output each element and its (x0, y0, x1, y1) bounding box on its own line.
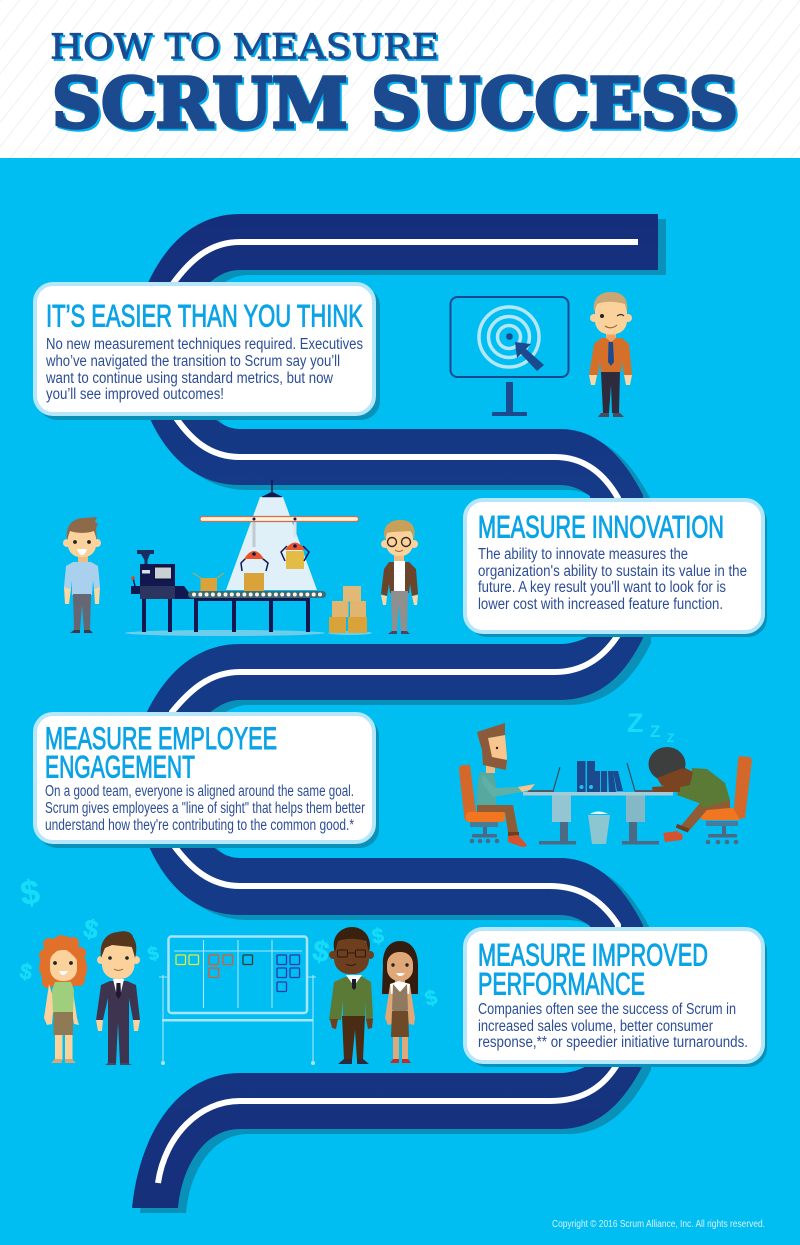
whiteboard with sticky notes (159, 936, 316, 1065)
decorative dollar signs (18, 873, 440, 1011)
decorative dollar signs: $ (310, 935, 332, 969)
body text: who’ve navigated the transition to Scrum say you’ll (45, 353, 340, 370)
figure: woman with dark hair in vest (382, 941, 418, 1063)
heading: IT’S EASIER THAN YOU THINK (46, 298, 363, 334)
winding road (132, 214, 666, 1213)
figure: man in dark suit (96, 931, 140, 1065)
Z Z Z (627, 708, 674, 745)
body text: No new measurement techniques required. Executives (46, 336, 363, 353)
robot arms (252, 521, 256, 547)
light cone (226, 497, 317, 590)
left laptop (553, 767, 560, 792)
decorative dollar signs: $ (423, 986, 440, 1011)
body text: The ability to innovate measures the (478, 546, 688, 563)
hopper (137, 550, 154, 566)
open box on belt (200, 578, 217, 591)
body text: you’ll see improved outcomes! (46, 386, 224, 403)
icon: monitor with target (450, 297, 568, 416)
sleeping man and chair (648, 747, 752, 844)
overhead rail (200, 516, 358, 522)
title line 1: HOW TO MEASURE (50, 28, 439, 68)
body text: On a good team, everyone is aligned around the same goal. (45, 783, 354, 800)
Z Z Z: Z (627, 708, 644, 738)
working man (477, 723, 535, 847)
scene: desk with working and sleeping employees (459, 708, 752, 847)
body text: response,** or speedier initiative turnarounds. (478, 1034, 748, 1051)
stacked boxes (343, 586, 361, 602)
binders (577, 761, 623, 792)
figure: woman with curly red hair (39, 935, 87, 1063)
figure: smiling man in blue shirt (63, 517, 101, 633)
Z Z Z: Z (650, 722, 660, 741)
left chair (459, 765, 505, 843)
table legs (142, 597, 310, 632)
sticky notes (176, 955, 300, 992)
heading: PERFORMANCE (478, 966, 645, 1002)
title line 1: HOW TO MEASURE (52, 30, 441, 70)
panel: it's easier than you think (35, 284, 380, 420)
body text: increased sales volume, better consumer (478, 1018, 713, 1035)
machine body (140, 564, 175, 587)
conveyor belt (188, 591, 326, 598)
title line 2: SCRUM SUCCESS (52, 64, 738, 144)
panel: measure employee engagement (35, 714, 379, 848)
body text (45, 783, 365, 834)
body text (478, 546, 747, 613)
heading (478, 936, 708, 1002)
panel: measure innovation (465, 500, 767, 637)
figure: man with glasses and brown jacket (381, 520, 418, 634)
heading (45, 720, 277, 784)
panel: measure improved performance (465, 929, 767, 1067)
body text: Scrum gives employees a "line of sight" that helps them better (45, 800, 365, 817)
Z Z Z: Z (667, 731, 674, 745)
decorative dollar signs: $ (371, 924, 386, 949)
decorative dollar signs: $ (81, 913, 102, 945)
body text (45, 336, 363, 403)
body text: Companies often see the success of Scrum in (478, 1001, 736, 1018)
decorative dollar signs: $ (18, 958, 34, 985)
table legs, bin (523, 792, 673, 844)
body text (478, 1001, 748, 1051)
body text: future. A key result you'll want to look for is (478, 579, 726, 596)
factory: production machine and conveyor (125, 480, 372, 636)
decorative dollar signs: $ (18, 873, 42, 913)
heading: ENGAGEMENT (45, 748, 195, 784)
figure: winking man in orange shirt (589, 292, 632, 417)
right laptop (627, 763, 635, 791)
body text: lower cost with increased feature function. (478, 596, 723, 613)
body text: want to continue using standard metrics, but now (45, 370, 334, 387)
title line 2: SCRUM SUCCESS (54, 66, 740, 146)
body text: organization's ability to sustain its value in the (478, 563, 747, 580)
heading: MEASURE EMPLOYEE (45, 720, 277, 756)
figure: man with glasses in green sweater (329, 927, 374, 1064)
header band (0, 0, 800, 158)
decorative dollar signs: $ (146, 943, 162, 966)
body text: understand how they're contributing to the common good.* (45, 817, 354, 834)
